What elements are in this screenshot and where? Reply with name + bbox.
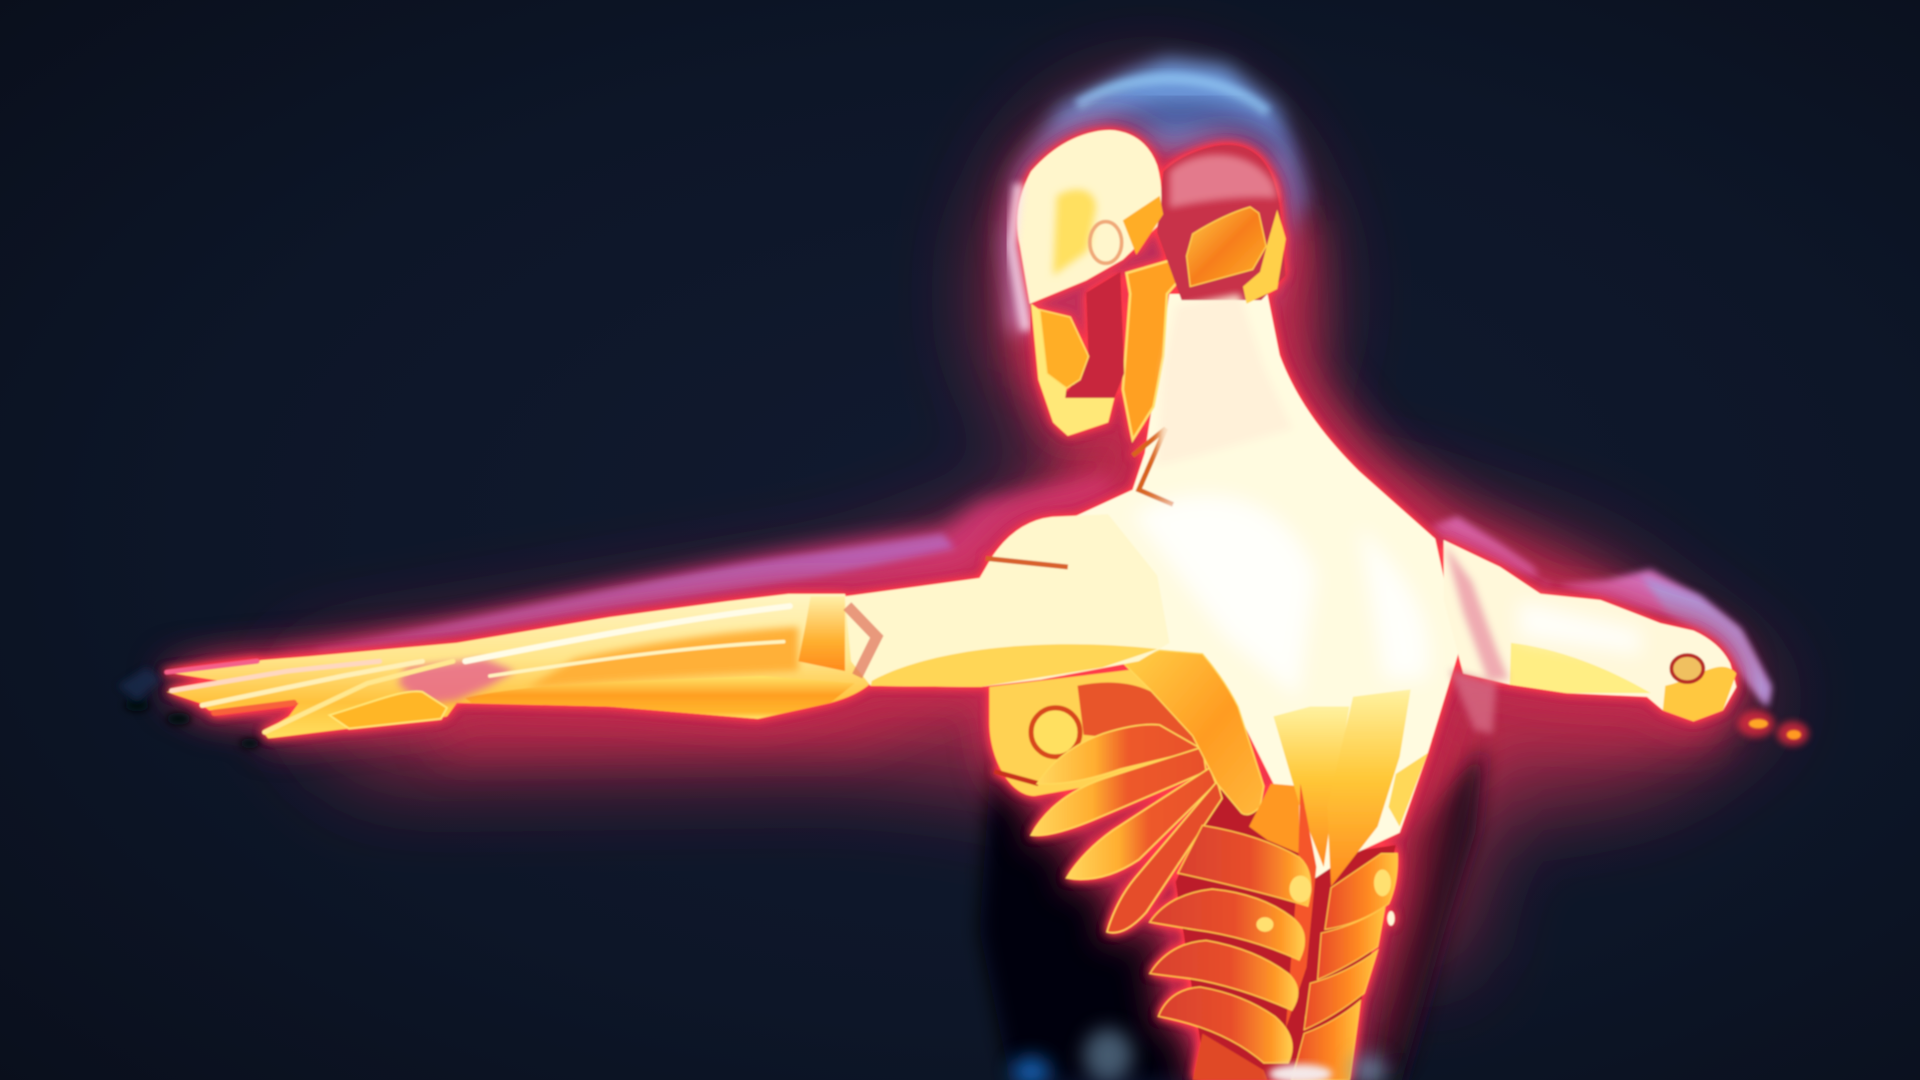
under-rib red core	[1176, 784, 1396, 1080]
right arm base	[1444, 540, 1736, 721]
right arm	[1444, 540, 1736, 721]
right fingertips	[1738, 710, 1809, 746]
forearm mid orange	[527, 627, 798, 688]
upper ribs fan	[1031, 724, 1222, 933]
red glow on dark right side	[1365, 722, 1463, 1053]
forearm lower orange band	[465, 676, 855, 719]
face red interior	[1053, 272, 1124, 398]
finger highlights	[167, 606, 790, 732]
palm yellow pad	[329, 691, 447, 729]
right fist	[1663, 667, 1736, 721]
lower left ribs	[1150, 825, 1311, 1063]
forearm and hand base	[167, 594, 871, 738]
head interior	[1017, 130, 1292, 465]
chest left yellow mass	[989, 667, 1206, 796]
blurred blue lower-body reflections	[1011, 1029, 1386, 1080]
brain pale upper tissue	[1169, 155, 1277, 208]
skull pale dome	[1017, 130, 1161, 304]
elbow tissue	[1445, 545, 1509, 680]
left arm	[167, 594, 871, 738]
orange shoulder flap	[1124, 650, 1264, 815]
rib highlight spots	[1256, 869, 1395, 932]
face orange panel	[1040, 310, 1089, 388]
translucent pink panel at right hip	[1450, 670, 1496, 733]
dark lower body silhouette	[980, 747, 1484, 1080]
spine strips	[1273, 689, 1428, 1029]
white lower spine highlight	[1269, 1064, 1332, 1080]
pale glass edge along face	[1011, 184, 1026, 331]
glowing figure	[167, 130, 1736, 1080]
ghost far arm left	[276, 475, 1133, 671]
ear ring	[1090, 222, 1122, 263]
skull orange wedge	[1123, 196, 1163, 255]
wide maroon aura around figure	[282, 92, 1776, 980]
dark fingertip shadows	[118, 667, 260, 748]
neck	[1123, 260, 1177, 504]
upper arm and shoulder	[845, 514, 1169, 687]
overexposed highlights on back	[1133, 495, 1641, 698]
lower right ribs	[1292, 853, 1397, 1080]
near red aura around shoulders and neck	[429, 220, 1727, 784]
rib base strand	[1193, 1033, 1267, 1080]
orange brain lobe	[1187, 207, 1266, 287]
jaw yellow	[1031, 304, 1114, 436]
right arm yellow underside	[1510, 643, 1651, 693]
skull yellow patch	[1053, 190, 1096, 276]
ghost far arm right	[1430, 517, 1771, 707]
brain	[1157, 144, 1286, 300]
torso pale back	[1053, 294, 1460, 882]
wrist pink tissue	[398, 659, 514, 704]
wrist cuff	[798, 596, 845, 671]
neck pale overlay	[1157, 294, 1292, 465]
orange side panel	[1249, 784, 1299, 853]
head: blue glass shell	[1003, 59, 1307, 337]
rear yellow strip	[1243, 209, 1286, 304]
